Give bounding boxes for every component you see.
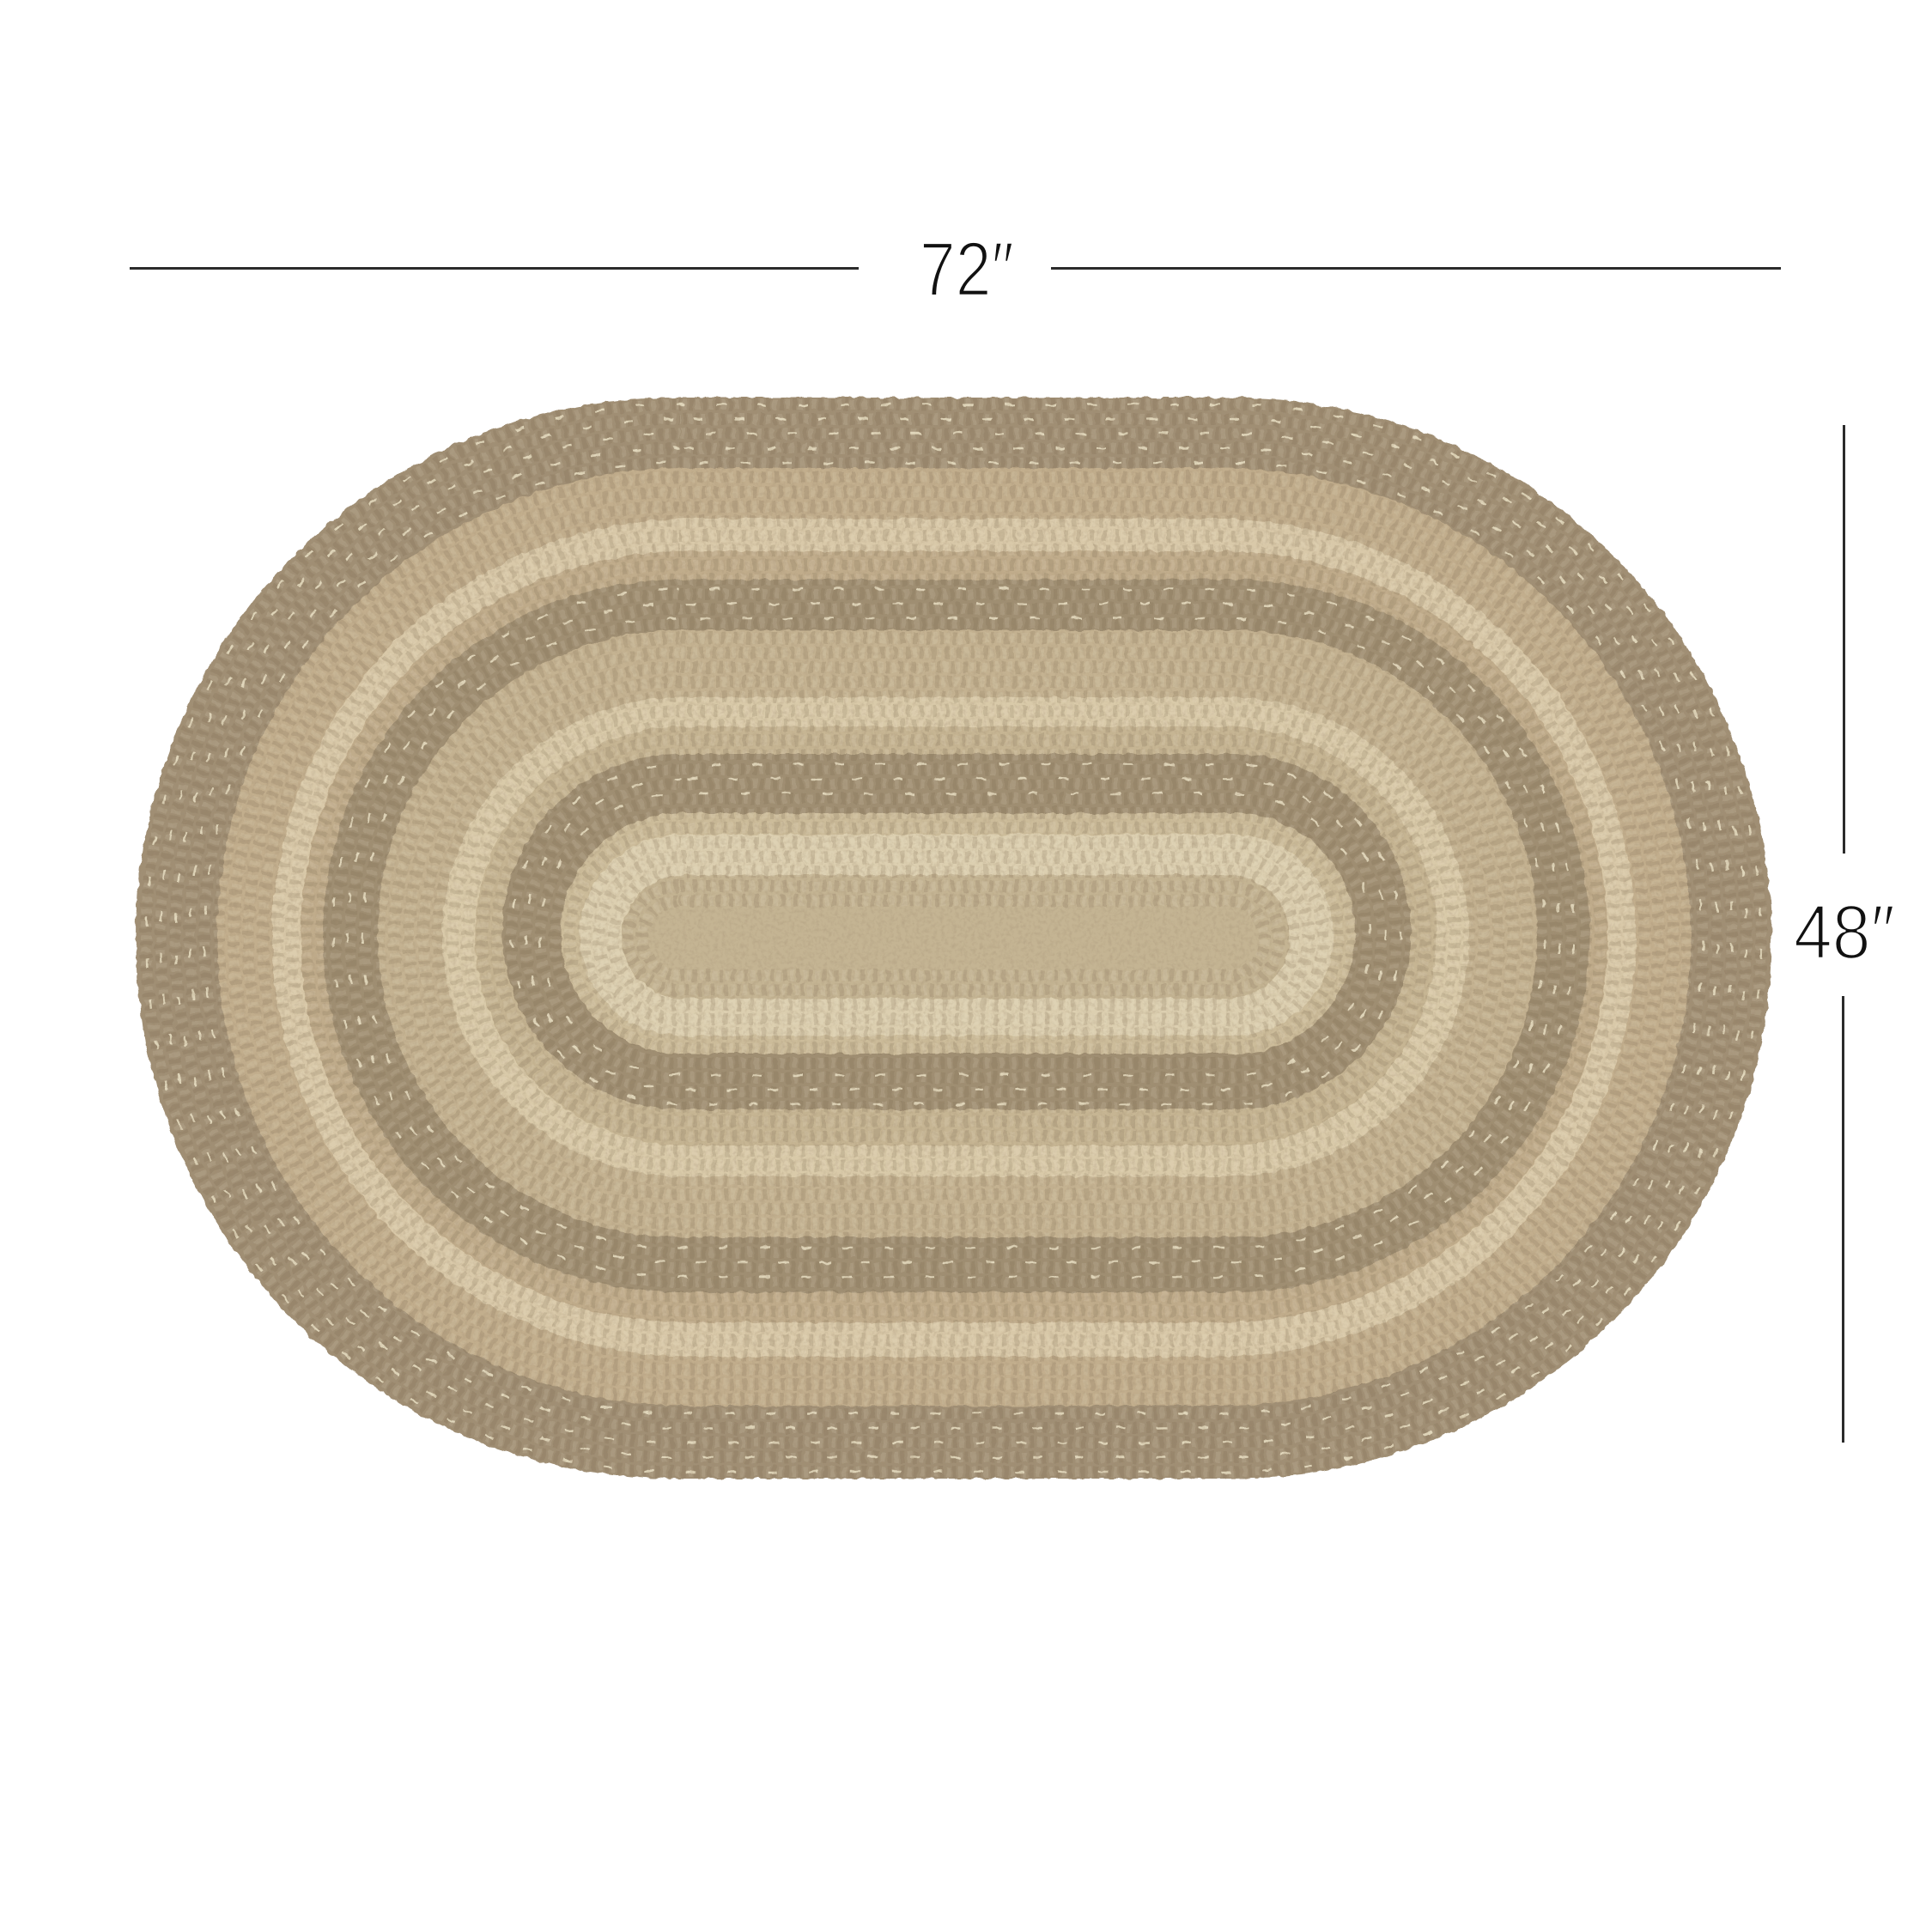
- width dimension: 72 inches: [130, 226, 1781, 312]
- band: middle medium: [378, 630, 1537, 1237]
- band: outer light: [272, 519, 1636, 1357]
- band: outer dark border: [136, 398, 1771, 1479]
- rope texture: [136, 398, 1771, 1479]
- height label: 48″: [1794, 889, 1895, 975]
- band: inner light: [580, 835, 1334, 1036]
- band: mottled centre: [622, 875, 1290, 999]
- band: outer medium: [217, 468, 1691, 1406]
- height dimension: 48 inches: [1794, 425, 1895, 1443]
- braided oval rug: [136, 398, 1771, 1479]
- band: inner medium light: [561, 813, 1355, 1054]
- band: middle light: [442, 697, 1469, 1176]
- band: middle dark ring: [323, 580, 1589, 1292]
- band: inner medium: [475, 726, 1437, 1145]
- band: inner dark ring: [502, 754, 1411, 1109]
- band: second medium: [301, 551, 1607, 1322]
- width label: 72″: [920, 226, 1014, 312]
